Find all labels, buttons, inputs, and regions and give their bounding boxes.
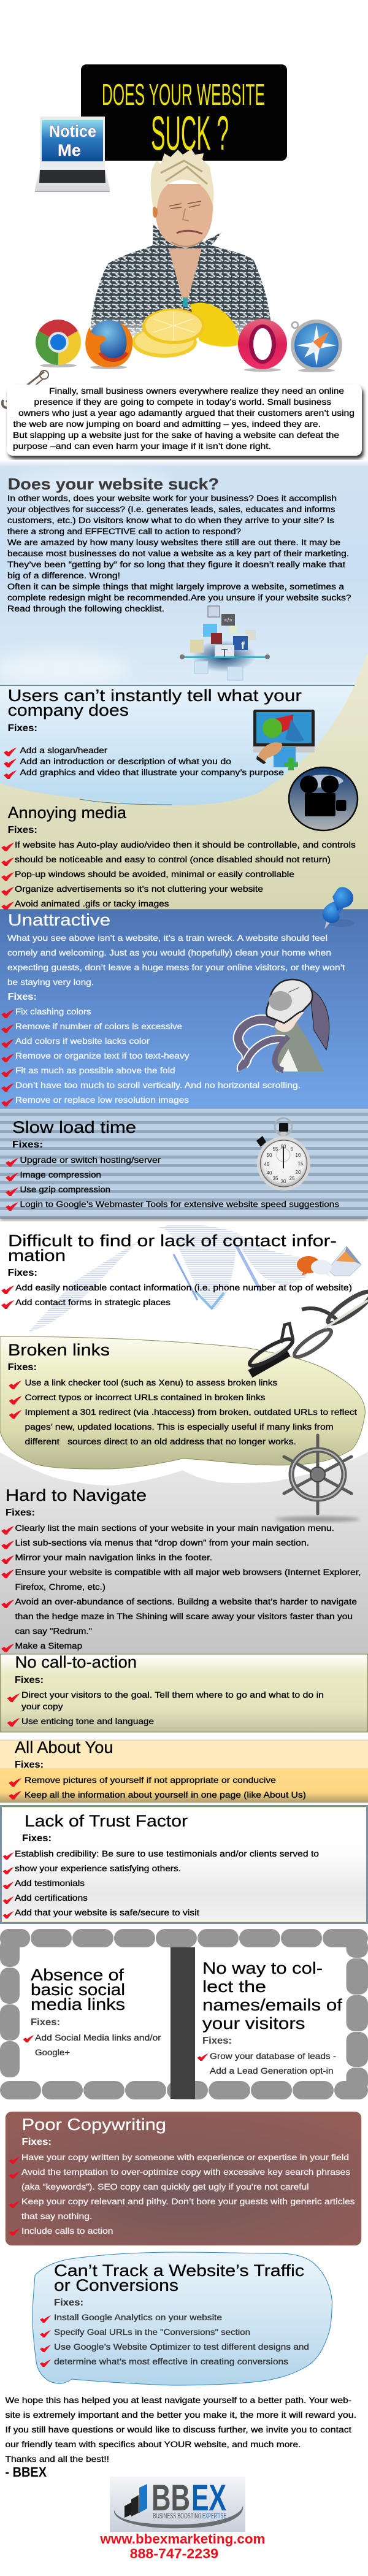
- fix list: Clearly list the main sections of your website in your main navigation menu.: [15, 1524, 334, 1533]
- fix list: [1, 1283, 352, 1309]
- heading: [31, 1966, 125, 2014]
- fix list: Firefox, Chrome, etc.): [15, 1582, 105, 1592]
- fix list: List sub-sections via menus that “drop down” from your main section.: [15, 1538, 309, 1547]
- fix list: [1, 1007, 301, 1106]
- fixes label: Fixes:: [31, 2017, 60, 2028]
- fix list: show your experience satisfying others.: [15, 1864, 181, 1873]
- panel: sky header section: [0, 460, 368, 686]
- icon: stopwatch: 25: [289, 1176, 295, 1181]
- fix list: Implement a 301 redirect (via .htaccess) from broken, outdated URLs to reflect: [25, 1408, 357, 1417]
- body paragraphs: because most businesses do not value a website as a key part of their marketing.: [7, 549, 349, 558]
- icon: safety pin: [2, 370, 48, 408]
- fix list: (aka “keywords”). SEO copy can quickly get ugly if you’re not careful: [21, 2182, 309, 2191]
- fix list: can say "Redrum.": [15, 1627, 92, 1636]
- description: What you see above isn’t a website, it’s a train wreck. A website should feel: [7, 933, 328, 943]
- body paragraphs: customers, etc.) Do visitors know what to do when they arrive to your site? Is: [7, 516, 334, 525]
- intro paragraph: the web are now jumping on board and admitting – yes, indeed they are.: [13, 420, 321, 429]
- closing message: Thanks and all the best!!: [5, 2455, 109, 2464]
- fix list: should be noticeable and easy to control (once disabled should not return): [15, 855, 331, 864]
- fix list: [1, 1524, 361, 1652]
- panel: poor copywriting: [6, 2112, 361, 2245]
- icon: stopwatch: 30: [281, 1179, 286, 1184]
- fix list: Include calls to action: [21, 2226, 113, 2236]
- body paragraphs: We are amazed by how many lousy websites there still are out there. It may be: [7, 538, 340, 547]
- fix list: Keep your copy relevant and pithy. Don’t bore your guests with generic articles: [21, 2197, 355, 2206]
- fix list: Install Google Analytics on your website: [54, 2313, 222, 2322]
- fixes label: Fixes:: [12, 1140, 43, 1150]
- fix list: Correct typos or incorrect URLs contained in broken links: [25, 1393, 266, 1402]
- icon: stopwatch: 20: [296, 1170, 301, 1175]
- fix list: Remove if number of colors is excessive: [15, 1022, 182, 1031]
- icon: stopwatch: 35: [273, 1176, 278, 1181]
- panel: absence of social media links: [23, 1966, 161, 2057]
- panel: hard to navigate: [1, 1486, 361, 1652]
- logo: BBEX: EXPERTISE: [202, 2513, 226, 2520]
- closing message: [5, 2396, 356, 2480]
- logo: BBEX: BB: [151, 2477, 190, 2518]
- description: comely and welcoming. Just as you would (hopefully) clean your home when: [7, 948, 331, 957]
- icon: laptop with Notice Me screen: Me: [58, 141, 81, 159]
- closing message: We hope this has helped you at least navigate yourself to a better path. Your web-: [5, 2396, 351, 2405]
- fix list: Add contact forms in strategic places: [15, 1298, 171, 1307]
- intro paragraph: presence if they are going to compete in today’s world. Small business: [34, 397, 331, 407]
- fix list: [1, 840, 356, 910]
- icon: Opera browser: [238, 319, 287, 372]
- fix list: Grow your database of leads -: [210, 2052, 336, 2061]
- fix list: Avoid an over-abundance of sections. Buildng a website that’s harder to navigate: [15, 1597, 357, 1606]
- illustration: wavy ribbon: [28, 1225, 307, 1332]
- background: khaki area: [0, 644, 368, 910]
- fix list: Avoid the temptation to over-optimize copy with excessive key search phrases: [21, 2168, 350, 2177]
- fix list: Specify Goal URLs in the "Conversions" section: [54, 2328, 250, 2337]
- fixes label: Fixes:: [8, 723, 37, 734]
- icon: chat bubbles and envelope: [297, 1246, 361, 1277]
- heading: Broken links: [8, 1341, 110, 1359]
- heading: [54, 2261, 304, 2294]
- icon: stopwatch: 55: [273, 1146, 278, 1152]
- logo: BBEX: BUSINESS BOOSTING: [153, 2513, 202, 2520]
- panel: users can't tell what your company does: [0, 685, 355, 805]
- icon cluster: floating web icons: T: [221, 647, 228, 659]
- fix list: your copy: [21, 1702, 63, 1711]
- icon: Chrome browser: [36, 320, 81, 367]
- fix list: Add certifications: [15, 1893, 88, 1903]
- panel: annoying media: [1, 803, 356, 910]
- panel: lack of trust factor: [1, 1806, 367, 1923]
- fix list: [4, 746, 284, 779]
- fixes label: Fixes:: [8, 825, 37, 835]
- description: expecting guests, don’t leave a huge mess for your online visitors, or they won’t: [7, 963, 345, 972]
- icon: stopwatch: 40: [267, 1170, 272, 1176]
- icon: stopwatch: 60: [281, 1144, 286, 1149]
- illustration: tentacled creature: [238, 979, 329, 1071]
- icon cluster: floating web icons: f: [241, 640, 245, 651]
- closing message: - BBEX: [5, 2464, 47, 2480]
- fix list: Add Social Media links and/or: [35, 2033, 161, 2042]
- heading: Lack of Trust Factor: [25, 1812, 188, 1830]
- description: [7, 933, 345, 987]
- fixes label: Fixes:: [202, 2036, 232, 2046]
- fix list: Add a slogan/header: [20, 746, 108, 755]
- intro paragraph: But slapping up a website just for the sake of having a website can defeat the: [13, 431, 339, 440]
- fixes label: Fixes:: [54, 2298, 83, 2308]
- fix list: Keep all the information about yourself in one page (like About Us): [25, 1790, 306, 1800]
- icon cluster: floating web icons: </>: [224, 617, 232, 623]
- heading: company does: [8, 701, 129, 719]
- fix list: Add easily noticeable contact information (i.e. phone number at top of website): [15, 1283, 352, 1292]
- fix list: Google+: [35, 2048, 70, 2057]
- heading: or Conversions: [54, 2276, 178, 2294]
- panel: broken links: [0, 1336, 365, 1469]
- panel: slow load time: [0, 1109, 368, 1221]
- fix list: determine what’s most effective in creating conversions: [54, 2357, 288, 2366]
- title banner: SUCK ?: [151, 105, 229, 160]
- fix list: Upgrade or switch hosting/server: [20, 1156, 161, 1165]
- fix list: [7, 1690, 324, 1727]
- fix list: [9, 1378, 357, 1446]
- fix list: Remove or organize text if too text-heavy: [15, 1051, 190, 1060]
- fix list: Add that your website is safe/secure to visit: [15, 1908, 199, 1917]
- icon: stopwatch: [256, 1118, 310, 1190]
- heading: Hard to Navigate: [6, 1486, 147, 1505]
- icon: Safari compass: [292, 321, 340, 372]
- body paragraphs: Often it can be simple things that might largely improve a website, sometimes a: [7, 582, 345, 591]
- icon: broken chain: [247, 1287, 368, 1374]
- intro paragraph: Finally, small business owners everywhere realize they need an online: [49, 386, 344, 396]
- fix list: Add colors if website lacks color: [15, 1037, 150, 1046]
- fix list: Use Google’s Website Optimizer to test different designs and: [54, 2342, 309, 2352]
- fix list: Fix clashing colors: [15, 1007, 91, 1016]
- closing message: our friendly team with specifics about YOUR website, and much more.: [5, 2440, 301, 2449]
- website address and phone: www.bbexmarketing.com: [99, 2531, 265, 2547]
- heading: [202, 1959, 343, 2033]
- fixes label: Fixes:: [22, 1833, 52, 1844]
- frame: grey pill border: [0, 1929, 368, 2099]
- heading: Slow load time: [12, 1118, 136, 1137]
- heading: Difficult to find or lack of contact infor-: [8, 1232, 337, 1250]
- heading: does your website suck: Does your website suck?: [8, 475, 219, 493]
- fix list: Establish credibility: Be sure to use testimonials and/or clients served to: [15, 1849, 319, 1858]
- fix list: Add an introduction or description of what you do: [20, 757, 231, 766]
- heading: basic social: [31, 1980, 125, 1999]
- logo: BBEX: [110, 2477, 245, 2532]
- fix list: [40, 2313, 309, 2367]
- fix list: that say nothing.: [21, 2212, 92, 2221]
- intro paragraph: owners who just a year ago adamantly argued that their customers aren’t using: [18, 408, 355, 418]
- icon: lemons: [132, 303, 242, 358]
- body paragraphs: your objectives for success? (I.e. generates leads, sales, educates and informs: [7, 505, 335, 514]
- body paragraphs: They’ve been “getting by” for so long that they figure it doesn’t really make that: [7, 560, 345, 569]
- fix list: Add a Lead Generation opt-in: [210, 2066, 334, 2076]
- icon: stopwatch: 15: [298, 1161, 304, 1167]
- fix list: [197, 2052, 336, 2076]
- website address and phone: [99, 2531, 265, 2561]
- fix list: Remove or replace low resolution images: [15, 1095, 189, 1105]
- heading: [8, 686, 302, 719]
- heading: All About You: [15, 1738, 113, 1757]
- intro paragraph: [13, 386, 355, 451]
- fix list: [2, 1849, 319, 1919]
- fix list: Direct your visitors to the goal. Tell them where to go and what to do in: [21, 1690, 324, 1700]
- fix list: Remove pictures of yourself if not appropriate or conducive: [25, 1776, 276, 1785]
- panel: hard to navigate background: [0, 1452, 368, 1654]
- panel: can't track traffic or conversions: [33, 2252, 332, 2385]
- fix list: Use enticing tone and language: [21, 1717, 154, 1726]
- icon: Firefox browser: [85, 320, 132, 369]
- fix list: [9, 1776, 306, 1800]
- panel: difficult to find contact info: [1, 1232, 352, 1309]
- icon: video camera button: [289, 767, 358, 830]
- closing message: site is extremely important and the better you make it, the more it will reward you.: [5, 2410, 356, 2420]
- icon: push pin: [323, 887, 355, 929]
- illustration: grimacing person: [86, 149, 276, 340]
- panel: intro card: [7, 385, 364, 459]
- panel: no way to collect names and emails: [197, 1959, 343, 2076]
- heading: Absence of: [31, 1966, 125, 1984]
- fix list: If website has Auto-play audio/video then it should be controllable, and controls: [15, 840, 356, 849]
- icon: stopwatch: 50: [267, 1152, 272, 1158]
- fix list: Make a Sitemap: [15, 1641, 82, 1650]
- fix list: [9, 2153, 355, 2236]
- icon: stopwatch: 5: [291, 1146, 294, 1152]
- panel: all about you: [0, 1738, 368, 1803]
- heading: [8, 1232, 337, 1265]
- fix list: Add testimonials: [15, 1879, 85, 1888]
- website address and phone: 888-747-2239: [130, 2546, 218, 2561]
- heading: your visitors: [202, 2014, 305, 2033]
- body paragraphs: complete redesign might be recommended.Are you unsure if your website sucks?: [7, 593, 351, 602]
- description: be staying very long.: [7, 978, 94, 987]
- title banner: [81, 64, 287, 161]
- fix list: different sources direct to an old address that no longer works.: [25, 1437, 296, 1446]
- heading: mation: [8, 1246, 66, 1265]
- heading: No call-to-action: [15, 1653, 137, 1671]
- fixes label: Fixes:: [8, 1268, 37, 1278]
- closing message: If you still have questions or would like to discuss further, we invite you to contact: [5, 2425, 351, 2434]
- fix list: [6, 1156, 339, 1211]
- fix list: Avoid animated .gifs or tacky images: [15, 899, 169, 908]
- fix list: than the hedge maze in The Shining will scare away your visitors faster than you: [15, 1612, 353, 1621]
- logo: BBEX: EX: [191, 2477, 226, 2518]
- heading: lect the: [202, 1977, 266, 1996]
- intro paragraph: purpose –and can even harm your image if it isn’t done right.: [13, 442, 271, 451]
- fix list: Ensure your website is compatible with all major web browsers (Internet Explorer,: [15, 1568, 361, 1577]
- fix list: Mirror your main navigation links in the footer.: [15, 1553, 212, 1562]
- panel: no call-to-action: [0, 1653, 368, 1732]
- icon: laptop with Notice Me screen: [35, 117, 110, 192]
- fixes label: Fixes:: [6, 1508, 35, 1518]
- icon: ship wheel: [275, 1435, 360, 1522]
- heading: Can’t Track a Website’s Traffic: [54, 2261, 304, 2280]
- fix list: Add graphics and video that illustrate your company’s purpose: [20, 768, 284, 777]
- icon cluster: floating web icons: [180, 606, 270, 680]
- icon: stopwatch: 10: [296, 1152, 301, 1158]
- body paragraphs: there a strong and EFFECTIVE call to action to respond?: [7, 527, 241, 536]
- fixes label: Fixes:: [15, 1760, 44, 1770]
- icon: stopwatch: 45: [264, 1162, 270, 1167]
- fix list: Organize advertisements so it’s not cluttering your website: [15, 884, 263, 894]
- body paragraphs: [7, 494, 351, 613]
- fix list: [23, 2033, 161, 2057]
- fix list: Pop-up windows should be avoided, minimal or easily controllable: [15, 870, 294, 879]
- heading: names/emails of: [202, 1996, 343, 2014]
- heading: No way to col-: [202, 1959, 323, 1977]
- fix list: Have your copy written by someone with experience or expertise in your field: [21, 2153, 349, 2162]
- fix list: Use a link checker tool (such as Xenu) to assess broken links: [25, 1378, 277, 1387]
- fixes label: Fixes:: [22, 2137, 52, 2147]
- fix list: Fit as much as possible above the fold: [15, 1066, 175, 1075]
- fixes label: Fixes:: [8, 992, 37, 1002]
- fix list: Image compression: [20, 1170, 101, 1179]
- fix list: Don’t have too much to scroll vertically. And no horizontal scrolling.: [15, 1081, 301, 1090]
- panel: unattractive: [0, 910, 368, 1108]
- fixes label: Fixes:: [15, 1675, 44, 1685]
- fixes label: Fixes:: [8, 1362, 37, 1373]
- fix list: Login to Google’s Webmaster Tools for extensive website speed suggestions: [20, 1200, 339, 1209]
- divider: dark column: [171, 1947, 195, 2099]
- heading: media links: [31, 1995, 125, 2014]
- heading: Poor Copywriting: [22, 2115, 166, 2134]
- body paragraphs: Read through the following checklist.: [7, 604, 164, 613]
- heading: Annoying media: [8, 803, 126, 822]
- fix list: Use gzip compression: [20, 1185, 110, 1194]
- heading: Unattractive: [8, 911, 110, 929]
- fix list: pages’ new, updated locations. This is especially useful if many links from: [25, 1422, 334, 1432]
- body paragraphs: big of a difference. Wrong!: [7, 571, 120, 580]
- body paragraphs: In other words, does your website work for your business? Does it accomplish: [7, 494, 337, 503]
- icon: laptop with Notice Me screen: Notice: [49, 122, 96, 140]
- heading: Users can’t instantly tell what your: [8, 686, 302, 705]
- icon: monitor with 3D shapes: [253, 710, 315, 770]
